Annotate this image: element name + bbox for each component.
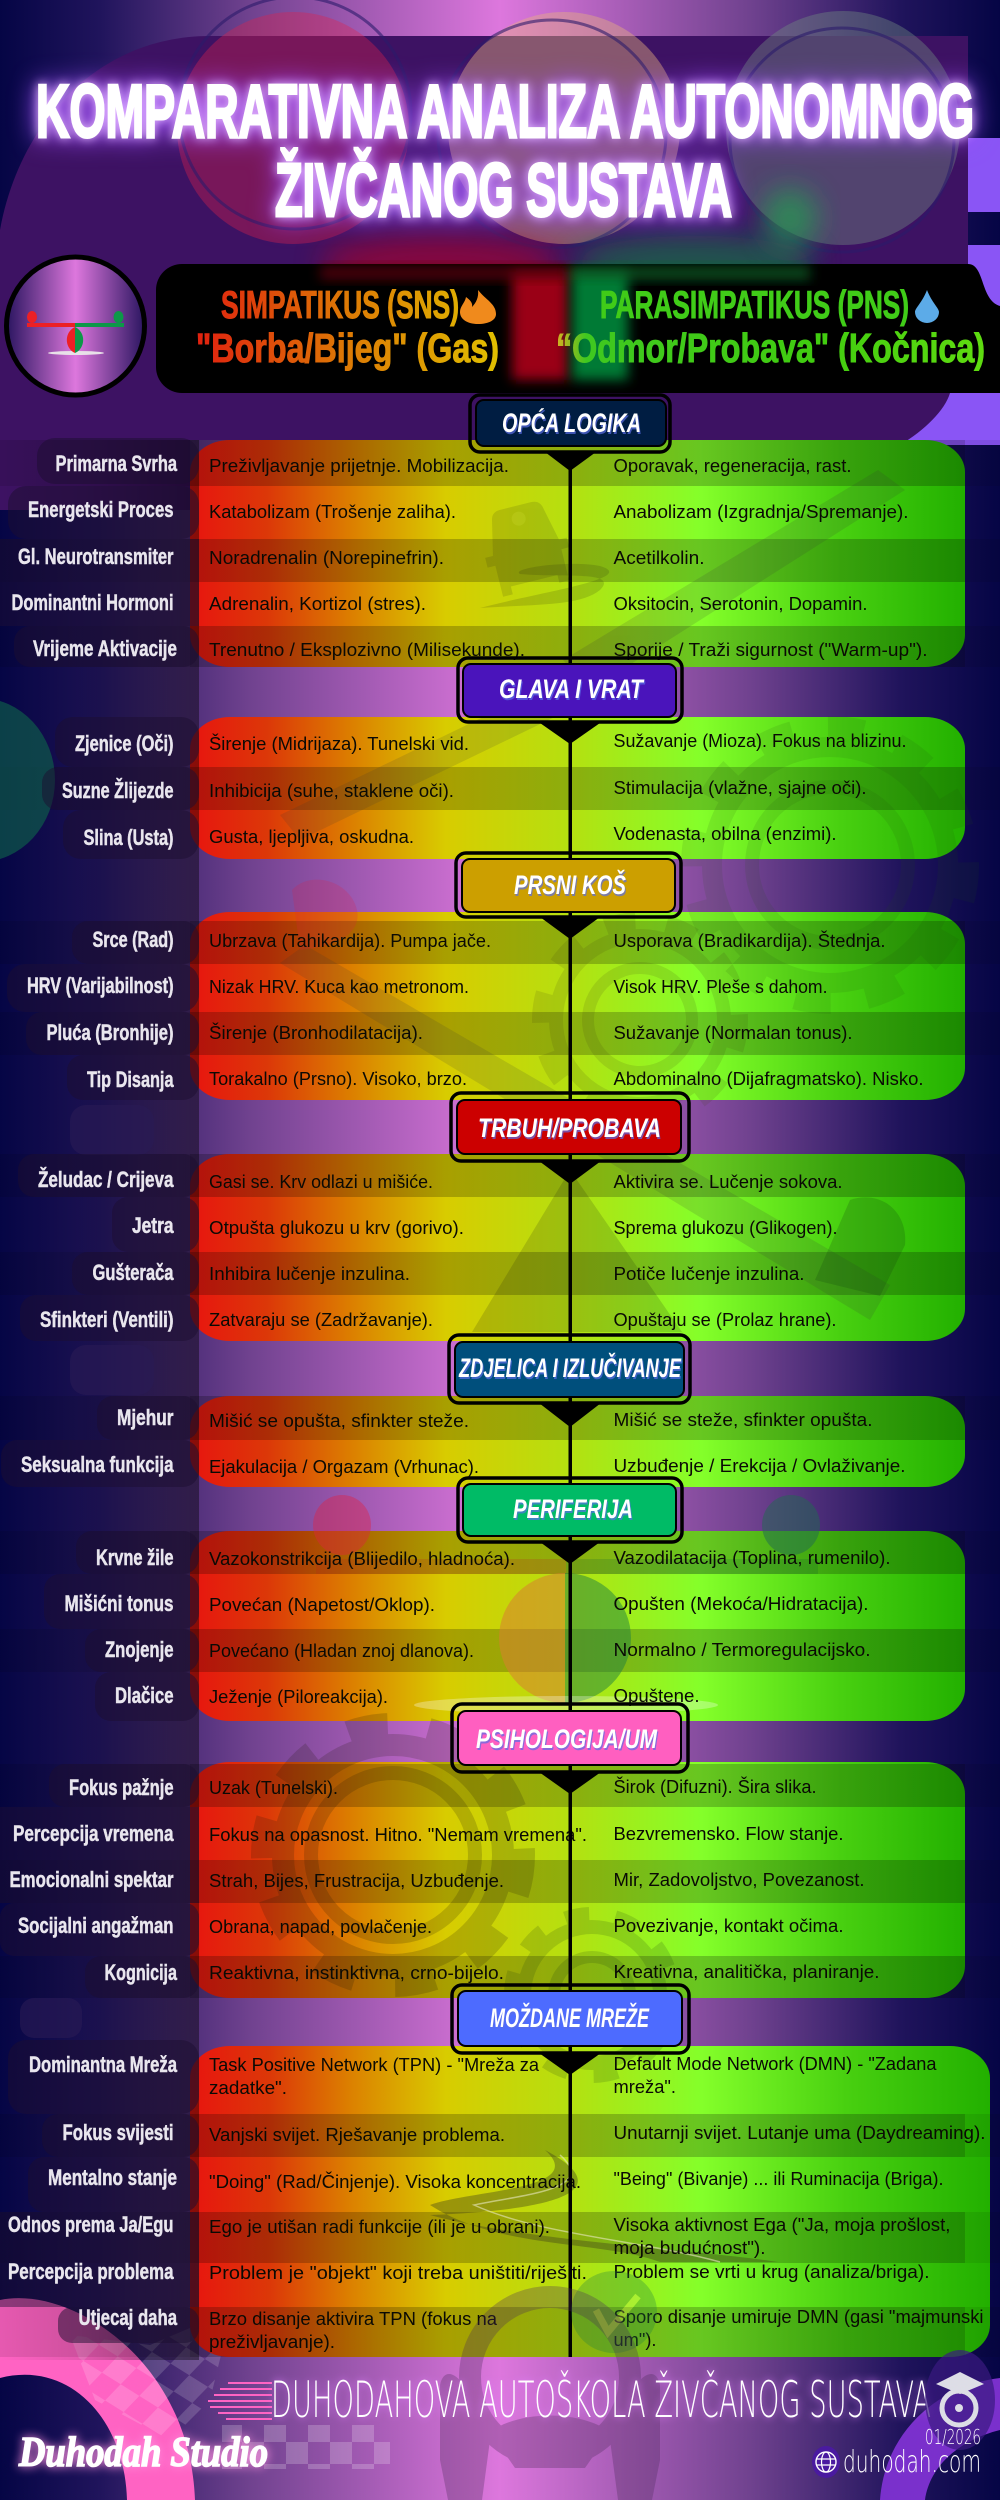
row: HRV: HRV (Varijabilnost) [27,973,174,998]
row: Vrijeme Aktivacije [14,626,928,667]
row: Percepcija problema: Problem je "objekt" koji treba uništiti/riješiti. [209,2263,587,2283]
row: Energetski Proces [8,486,908,539]
row: Tip Disanja [67,1055,924,1100]
brand: Duhodah Studio: Duhodah Studio [18,2430,268,2476]
comparison panel backgrounds [190,440,990,2357]
decorative gap tab [70,1345,154,1395]
row: Kognicija [85,1956,880,1998]
decorative watermark: green left blob [0,698,55,862]
row: Mišićni tonus: Mišićni tonus [64,1591,174,1616]
row: Znojenje: Normalno / Termoregulacijsko. [614,1640,870,1660]
row: Gušterača [72,1252,804,1295]
row: Dlačice: Opuštene. [614,1686,700,1706]
row: HRV: Visok HRV. Pleše s dahom. [614,977,828,997]
row: Percepcija problema: Problem se vrti u krug (analiza/briga). [614,2262,930,2282]
row: Gl. Neurotransmiter: Acetilkolin. [614,548,704,568]
watermark: lower left gear [263,1725,523,1985]
row: Dominantna Mreža: Default Mode Network (DMN) - "Zadana [614,2054,937,2074]
heading: OPĆA LOGIKA [470,395,670,471]
row: Dominantna Mreža: Task Positive Network (TPN) - "Mreža za [209,2055,540,2075]
heading: PRSNI KOŠ: PRSNI KOŠ [514,869,626,900]
row: Seksualna funkcija: Uzbuđenje / Erekcija / Ovlaživanje. [614,1456,906,1476]
watermark: car skidding [475,496,577,599]
heading: PSIHOLOGIJA/UM: PSIHOLOGIJA/UM [476,1724,657,1754]
heading: PSIHOLOGIJA/UM [452,1704,688,1794]
row: Zjenice: Sužavanje (Mioza). Fokus na blizinu. [614,731,906,751]
row: Krvne žile [76,1531,890,1574]
row: Dominantna Mreža: zadatke". [209,2078,287,2098]
row: Srce: Usporava (Bradikardija). Štednja. [614,930,886,951]
watermark: steering wheel with hands [440,2297,660,2500]
row: Vrijeme Aktivacije: Trenutno / Eksplozivno (Milisekunde). [209,640,525,660]
row: Tip Disanja: Torakalno (Prsno). Visoko, brzo. [209,1069,467,1089]
heading: OPĆA LOGIKA: OPĆA LOGIKA [502,407,641,438]
watermark: road warning triangle [472,1170,682,1332]
row: HRV [7,964,828,1012]
row: Seksualna funkcija [1,1440,906,1487]
row: Percepcija problema [0,2259,930,2307]
heading: GLAVA I VRAT: GLAVA I VRAT [499,674,645,704]
row: Želudac: Želudac / Crijeva [38,1167,174,1192]
row: Socijalni angažman [0,1903,844,1956]
decoration: purple arc bottom right [880,2378,1000,2500]
row: Fokus pažnje: Fokus pažnje [69,1775,174,1800]
row: Percepcija vremena: Percepcija vremena [13,1821,174,1846]
row: Odnos prema Ja/Egu: Visoka aktivnost Ega ("Ja, moja prošlost, [614,2215,950,2235]
heading: TRBUH/PROBAVA: TRBUH/PROBAVA [478,1113,661,1143]
row: Odnos prema Ja/Egu: Ego je utišan radi funkcije (ili je u obrani). [209,2217,550,2237]
row: Znojenje: Znojenje [105,1637,174,1662]
row: Utjecaj daha: Brzo disanje aktivira TPN (fokus na [209,2309,498,2329]
row: Emocionalni spektar: Strah, Bijes, Frustracija, Uzbuđenje. [209,1871,504,1891]
row: Sfinkteri: Zatvaraju se (Zadržavanje). [209,1310,433,1330]
row: Socijalni angažman: Obrana, napad, povlačenje. [209,1917,432,1937]
row: Suzne Žlijezde: Inhibicija (suhe, staklene oči). [209,781,454,801]
row: Fokus pažnje [49,1764,816,1807]
row: Fokus pažnje: Širok (Difuzni). Šira slika. [614,1776,816,1797]
decoration: pink steering ring with checker flag [0,2298,232,2500]
row: Percepcija vremena: Bezvremensko. Flow stanje. [614,1824,844,1844]
section: chest [7,921,924,1155]
section: pelvis and excretion [1,1396,906,1487]
row: Dlačice: Dlačice [115,1683,174,1708]
row: Emocionalni spektar: Mir, Zadovoljstvo, Povezanost. [614,1870,864,1890]
row: Vrijeme Aktivacije: Sporije / Traži sigurnost ("Warm-up"). [614,640,928,660]
row: Kognicija: Reaktivna, instinktivna, crno-bijelo. [209,1963,504,1983]
row: Sfinkteri [20,1295,836,1341]
heading: MOŽDANE MREŽE: MOŽDANE MREŽE [490,2002,650,2033]
row: Percepcija vremena [0,1807,844,1860]
decorative gap tab [20,1998,82,2038]
row: Srce: Ubrzava (Tahikardija). Pumpa jače. [209,931,491,951]
row: Želudac: Aktivira se. Lučenje sokova. [614,1172,842,1192]
row: Kognicija: Kreativna, analitička, planiranje. [614,1962,880,1982]
row: Dlačice [95,1672,700,1721]
title [36,69,974,232]
heading: PRSNI KOŠ [456,853,681,939]
row: Gušterača: Potiče lučenje inzulina. [614,1264,804,1284]
watermark: middle gear [542,922,738,1118]
row: Primarna Svrha [37,438,852,484]
row: Odnos prema Ja/Egu [0,2212,950,2263]
row: Krvne žile: Vazokonstrikcija (Blijedilo, hladnoća). [209,1549,515,1569]
row: Suzne Žlijezde: Stimulacija (vlažne, sjajne oči). [614,778,866,798]
heading: PERIFERIJA: PERIFERIJA [513,1494,633,1524]
background shapes: top purple area [0,0,1000,510]
subtitle bar: SNS versus PNS [156,264,1000,393]
row: Socijalni angažman: Povezivanje, kontakt očima. [614,1916,844,1936]
row: Mišićni tonus: Opušten (Mekoća/Hidratacija). [614,1594,868,1614]
row: Slina: Gusta, ljepljiva, oskudna. [209,827,414,847]
row: Dominantni Hormoni: Oksitocin, Serotonin, Dopamin. [614,594,868,614]
row: Gušterača: Gušterača [92,1260,174,1285]
row: Fokus svijesti: Vanjski svijet. Rješavanje problema. [209,2125,505,2145]
row: Fokus svijesti [42,2114,986,2157]
row: Dominantni Hormoni [0,582,868,626]
row: Mišićni tonus [44,1574,868,1629]
row: Gušterača: Inhibira lučenje inzulina. [209,1264,410,1284]
heading: TRBUH/PROBAVA [451,1093,689,1184]
heading: ZDJELICA I IZLUČIVANJE [449,1335,690,1427]
watermark: upper right gear [692,727,968,1003]
row: Dominantna Mreža: Dominantna Mreža [29,2052,178,2077]
section: general logic [0,438,928,667]
row: Jetra: Jetra [132,1213,174,1238]
decoration: checker flag strip [222,2425,390,2469]
row: Utjecaj daha: Utjecaj daha [78,2305,178,2330]
row: Utjecaj daha [58,2305,984,2352]
row: Dlačice: Ježenje (Piloreakcija). [209,1687,388,1707]
SNS heading line 1: SIMPATIKUS (SNS) [221,284,459,327]
section: brain networks [0,2040,986,2352]
icon: flame [460,290,496,324]
section: head and neck [42,717,906,859]
row: Fokus svijesti: Unutarnji svijet. Lutanje uma (Daydreaming). [614,2123,986,2143]
row: Socijalni angažman: Socijalni angažman [18,1913,174,1938]
footer speed lines [208,2382,272,2420]
watermark: balance figure [313,1495,820,1714]
row: Mentalno stanje [28,2157,944,2212]
row: Krvne žile: Vazodilatacija (Toplina, rumenilo). [614,1548,890,1568]
row: Dominantni Hormoni: Adrenalin, Kortizol (stres). [209,594,426,614]
icon: water drop [915,290,939,323]
row: Tip Disanja: Abdominalno (Dijafragmatsko). Nisko. [614,1069,924,1089]
section: psychology and mind [0,1764,880,2038]
row: Dominantna Mreža [8,2040,937,2114]
row: Pluća [26,1012,852,1055]
row: Želudac: Gasi se. Krv odlazi u mišiće. [209,1172,433,1192]
row: Odnos prema Ja/Egu: moja budućnost"). [614,2238,766,2258]
row: Dominantna Mreža: mreža". [614,2077,676,2097]
row: Gl. Neurotransmiter: Noradrenalin (Norepinefrin). [209,548,444,568]
SNS heading line 2: "Borba/Bijeg" (Gas) [196,325,499,371]
row: Sfinkteri: Sfinkteri (Ventili) [40,1307,174,1332]
left label column shading [0,440,199,2360]
watermark: check badge [571,2271,657,2353]
section: abdomen and digestion [18,1154,842,1395]
row: Gl. Neurotransmiter: Gl. Neurotransmiter [18,544,174,569]
icon: graduation cap steering wheel [925,2350,995,2450]
row: Primarna Svrha: Preživljavanje prijetnje. Mobilizacija. [209,456,509,476]
row: Mjehur: Mišić se opušta, sfinkter steže. [209,1411,469,1431]
heading: PERIFERIJA [458,1478,682,1564]
row: Vrijeme Aktivacije: Vrijeme Aktivacije [33,636,177,661]
row: Energetski Proces: Anabolizam (Izgradnja/Spremanje). [614,502,908,522]
heading: GLAVA I VRAT [458,658,682,744]
row: Slina: Slina (Usta) [84,825,174,850]
row: Slina [63,810,836,859]
row: Primarna Svrha: Primarna Svrha [56,451,178,476]
section: periphery [44,1531,890,1721]
row: Sfinkteri: Opuštaju se (Prolaz hrane). [614,1310,836,1330]
row: Zjenice: Širenje (Midrijaza). Tunelski vid. [209,733,469,754]
logo: balance seesaw [6,257,144,395]
row: Zjenice: Zjenice (Oči) [75,731,174,756]
row: Energetski Proces: Energetski Proces [28,497,174,522]
row: Primarna Svrha: Oporavak, regeneracija, rast. [614,456,852,476]
row: Srce [72,921,886,964]
row: Znojenje: Povećano (Hladan znoj dlanova). [209,1641,474,1661]
row: Jetra: Sprema glukozu (Glikogen). [614,1218,838,1238]
row: Mentalno stanje: Mentalno stanje [48,2165,177,2190]
row: Dominantni Hormoni: Dominantni Hormoni [12,590,174,615]
row: Pluća: Sužavanje (Normalan tonus). [614,1023,852,1043]
row: Suzne Žlijezde [42,767,866,810]
central divider line [568,452,572,2357]
row: Fokus pažnje: Uzak (Tunelski). [209,1778,338,1798]
row: Kognicija: Kognicija [104,1960,178,1985]
watermark: winding road top [480,564,609,608]
watermark: lower right gear [512,1915,672,2075]
row: Suzne Žlijezde: Suzne Žlijezde [62,778,174,803]
row: Tip Disanja: Tip Disanja [87,1067,174,1092]
row: Seksualna funkcija: Seksualna funkcija [21,1452,174,1477]
row: Želudac [18,1154,842,1197]
row: Srce: Srce (Rad) [92,927,174,952]
row: Utjecaj daha: Sporo disanje umiruje DMN (gasi "majmunski [614,2307,984,2327]
row: Zjenice [55,717,906,767]
row: Gl. Neurotransmiter [0,539,704,582]
row: Odnos prema Ja/Egu: Odnos prema Ja/Egu [8,2212,174,2237]
row: HRV: Nizak HRV. Kuca kao metronom. [209,977,469,997]
row: Seksualna funkcija: Ejakulacija / Orgazam (Vrhunac). [209,1457,479,1477]
watermark: pink teardrop and green teardrop [292,880,905,1296]
heading: MOŽDANE MREŽE [452,1985,689,2075]
row: Mentalno stanje: "Being" (Bivanje) ... ili Ruminacija (Briga). [614,2169,944,2189]
row: Emocionalni spektar: Emocionalni spektar [10,1867,174,1892]
row: Emocionalni spektar [0,1860,864,1903]
decorative gap tab [70,1105,154,1155]
row: Percepcija problema: Percepcija problema [8,2259,174,2284]
alternating row strips [0,440,1000,2357]
row: Mjehur [97,1396,872,1440]
row: Pluća: Pluća (Bronhije) [46,1020,174,1045]
row: Znojenje [85,1629,870,1672]
row: Energetski Proces: Katabolizam (Trošenje zaliha). [209,502,456,522]
row: Mjehur: Mišić se steže, sfinkter opušta. [614,1410,872,1430]
heading: ZDJELICA I IZLUČIVANJE: ZDJELICA I IZLUČIVANJE [458,1352,682,1383]
row: Mentalno stanje: "Doing" (Rad/Činjenje). Visoka koncentracija. [209,2171,581,2192]
row: Jetra [112,1197,838,1252]
row: Mišićni tonus: Povećan (Napetost/Oklop). [209,1595,435,1615]
watermark: winding road bottom [430,2150,778,2262]
row: Utjecaj daha: um"). [614,2330,656,2350]
row: Pluća: Širenje (Bronhodilatacija). [209,1022,423,1043]
row: Jetra: Otpušta glukozu u krv (gorivo). [209,1218,464,1238]
row: Utjecaj daha: preživljavanje). [209,2332,335,2352]
row: Krvne žile: Krvne žile [96,1545,174,1570]
row: Fokus svijesti: Fokus svijesti [62,2120,174,2145]
watermark: diagonal wrench bands [280,470,905,1320]
row: Mjehur: Mjehur [117,1405,174,1430]
row: Percepcija vremena: Fokus na opasnost. Hitno. "Nemam vremena". [209,1825,587,1845]
row: Slina: Vodenasta, obilna (enzimi). [614,824,836,844]
